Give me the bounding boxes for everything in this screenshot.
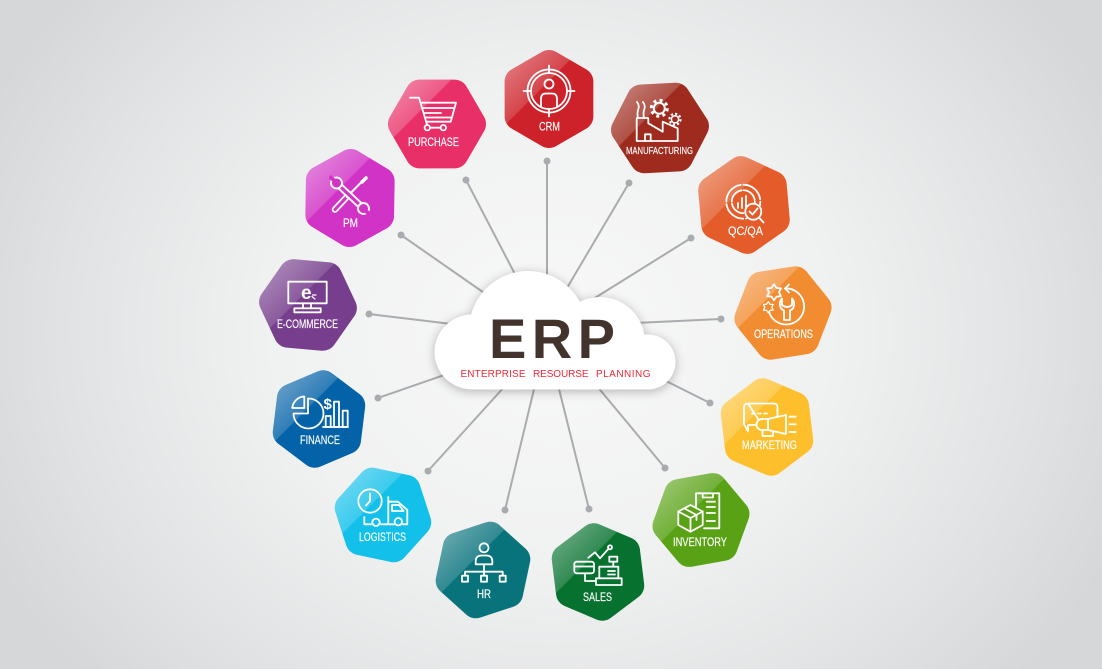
label: INVENTORY [673,537,727,549]
icon: e glyph: e [301,283,312,304]
hexagon [734,266,832,360]
icon: speech bubble and megaphone [744,404,796,436]
icon: target person [524,66,574,116]
icon: shopping cart [410,98,456,130]
icon: pie chart and bars [292,396,348,428]
label: FINANCE [300,435,340,447]
module: Manufacturing [611,82,709,174]
hexagon [720,378,814,476]
hexagon [334,468,432,562]
icon: monitor [288,282,327,312]
icon: gears and wrench cycle [763,284,804,324]
icon: cash register and card [574,545,622,585]
module: QC/QA [698,156,790,254]
module: HR [436,522,530,618]
module: Inventory [652,473,750,567]
module: Marketing [720,378,814,476]
label: PM [343,218,358,230]
subtitle: PLANNING [596,369,651,380]
hexagon [698,156,790,254]
hexagon [305,149,395,247]
icon: dial and magnifier [726,185,764,222]
subtitle [460,369,651,380]
module: Logistics [334,468,432,562]
label: MANUFACTURING [626,146,693,157]
hexagon [504,50,594,148]
hexagon [552,523,644,621]
icon: factory and gears [637,100,680,141]
cloud shape [434,271,676,390]
label: CRM [539,122,560,134]
central cloud: ERP [434,271,676,390]
module: E-Commerce [259,259,357,351]
label: HR [477,589,491,601]
label: QC/QA [728,226,763,238]
module: Finance [272,370,366,468]
hexagon [259,259,357,351]
label: SALES [583,592,612,604]
subtitle: ENTERPRISE [460,369,526,380]
label: PURCHASE [408,137,459,149]
module: PM [305,149,395,247]
module: Purchase [388,80,486,168]
icon: clipboard and box [678,493,719,532]
icon: crossed wrench and screwdriver [331,178,369,214]
icon: clock and truck [358,489,407,526]
module: Sales [552,523,644,621]
module: Operations [734,266,832,360]
label: OPERATIONS [754,329,813,341]
hexagon [436,522,530,618]
title: ERP: ERP [489,307,615,370]
module: CRM [504,50,594,148]
hexagon [272,370,366,468]
connector lines with end dots [366,158,724,514]
hexagon [652,473,750,567]
label: MARKETING [742,440,797,452]
icon: dollar sign: $ [324,396,332,413]
label: E-COMMERCE [277,319,338,331]
label: LOGISTICS [359,532,406,544]
subtitle: RESOURSE [533,369,589,380]
icon: org chart [462,543,506,582]
hexagon [611,82,709,174]
hexagon [388,80,486,168]
